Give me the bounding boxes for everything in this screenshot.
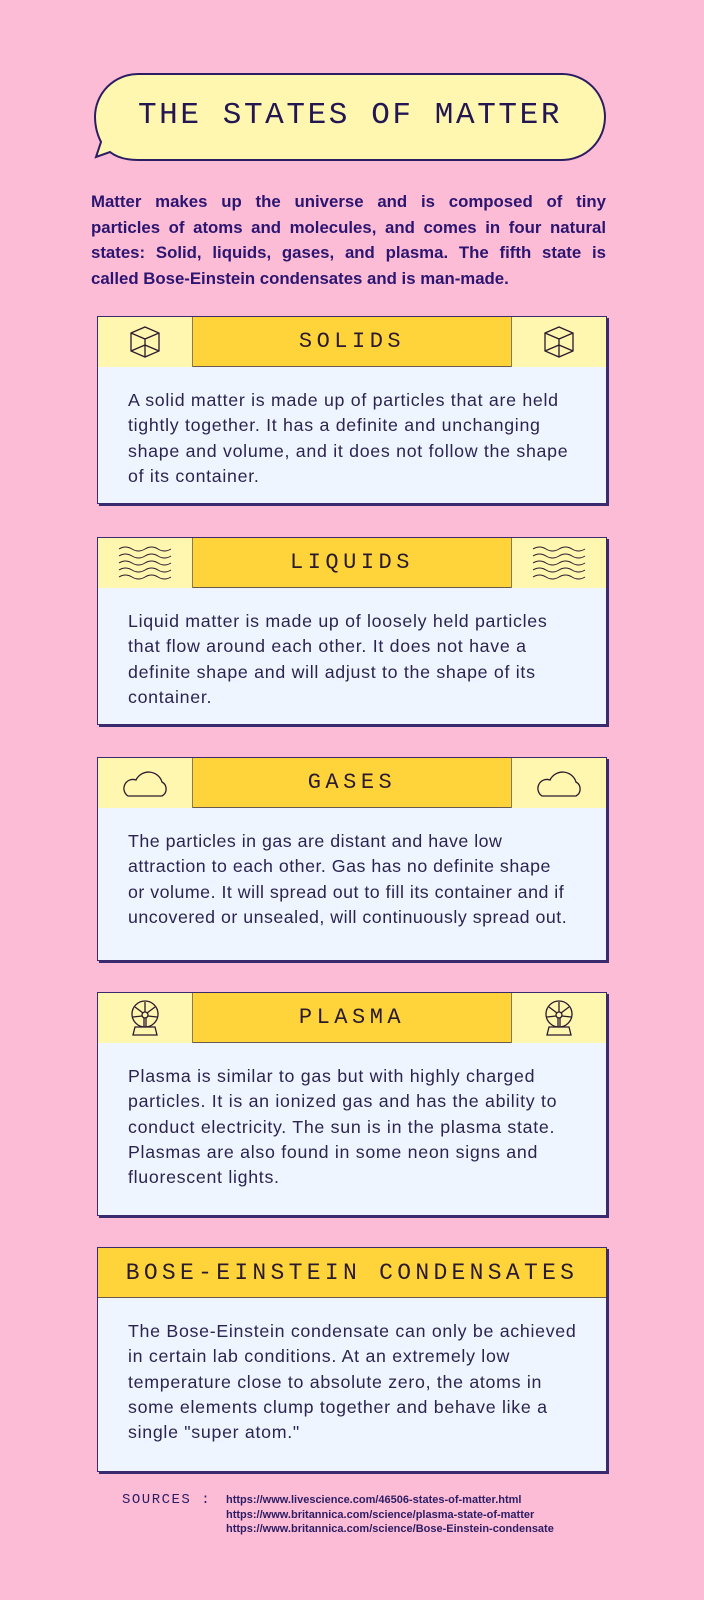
text: bose-einstein: temperature close to absolute zero, the atoms in xyxy=(128,1372,542,1392)
title bubble xyxy=(94,73,606,161)
text: solids: tightly together. It has a definite and unchanging xyxy=(128,415,541,435)
intro paragraph: particles of atoms and molecules, and comes in four natural xyxy=(91,218,606,236)
heading: liquids: LIQUIDS xyxy=(290,550,414,575)
sources list xyxy=(226,1494,554,1535)
title text: THE STATES OF MATTER xyxy=(138,98,562,133)
text: plasma: particles. It is an ionized gas and has the ability to xyxy=(128,1091,557,1111)
text: gases: uncovered or unsealed, will continuously spread out. xyxy=(128,907,567,927)
text: solids: of its container. xyxy=(128,466,260,486)
text: plasma: fluorescent lights. xyxy=(128,1167,280,1187)
text: solids: shape and volume, and it does not follow the shape xyxy=(128,441,568,461)
intro paragraph: called Bose-Einstein condensates and is man-made. xyxy=(91,268,509,288)
text: plasma: Plasma is similar to gas but with highly charged xyxy=(128,1066,535,1086)
heading: bose-einstein: BOSE-EINSTEIN CONDENSATES xyxy=(126,1260,578,1286)
icon: cube xyxy=(98,317,193,367)
intro paragraph: Matter makes up the universe and is composed of tiny xyxy=(91,192,606,211)
text: liquids: Liquid matter is made up of loosely held particles xyxy=(128,611,547,631)
sources list: https://www.britannica.com/science/Bose-Einstein-condensate xyxy=(226,1523,554,1535)
panel: liquids xyxy=(97,537,607,725)
heading: solids: SOLIDS xyxy=(299,329,405,354)
text: plasma: Plasmas are also found in some neon signs and xyxy=(128,1142,538,1162)
text: plasma: conduct electricity. The sun is in the plasma state. xyxy=(128,1117,555,1137)
text: gases xyxy=(128,831,567,927)
intro paragraph xyxy=(91,192,606,288)
text: plasma xyxy=(128,1066,557,1187)
text: solids xyxy=(128,390,568,486)
icon: plasma ball xyxy=(98,993,193,1043)
sources label: SOURCES : xyxy=(122,1492,211,1508)
text: bose-einstein: in certain lab conditions. At an extremely low xyxy=(128,1346,510,1366)
text: gases: or volume. It will spread out to fill its container and if xyxy=(128,882,564,902)
text: gases: The particles in gas are distant and have low xyxy=(128,831,502,851)
panel: gases xyxy=(97,757,607,961)
text: liquids: that flow around each other. It does not have a xyxy=(128,636,527,656)
panel: bose-einstein xyxy=(97,1247,607,1472)
text: bose-einstein: The Bose-Einstein condensate can only be achieved xyxy=(128,1321,576,1341)
panel: solids xyxy=(97,316,607,504)
panel: plasma xyxy=(97,992,607,1216)
heading: plasma: PLASMA xyxy=(299,1005,405,1030)
text: liquids: container. xyxy=(128,687,212,707)
icon: cloud xyxy=(98,758,193,808)
sources list: https://www.livescience.com/46506-states-of-matter.html xyxy=(226,1494,521,1506)
heading: gases: GASES xyxy=(308,770,396,795)
text: bose-einstein: some elements clump together and behave like a xyxy=(128,1397,548,1417)
text: bose-einstein xyxy=(128,1321,576,1442)
text: liquids xyxy=(128,611,547,707)
heading: bose-einstein xyxy=(98,1248,606,1298)
intro paragraph: states: Solid, liquids, gases, and plasma. The fifth state is xyxy=(91,243,606,262)
text: gases: attraction to each other. Gas has no definite shape xyxy=(128,856,551,876)
text: solids: A solid matter is made up of particles that are held xyxy=(128,390,559,410)
text: bose-einstein: single "super atom." xyxy=(128,1422,300,1442)
icon: waves xyxy=(98,538,193,588)
sources list: https://www.britannica.com/science/plasma-state-of-matter xyxy=(226,1508,534,1520)
text: liquids: definite shape and will adjust to the shape of its xyxy=(128,662,536,682)
